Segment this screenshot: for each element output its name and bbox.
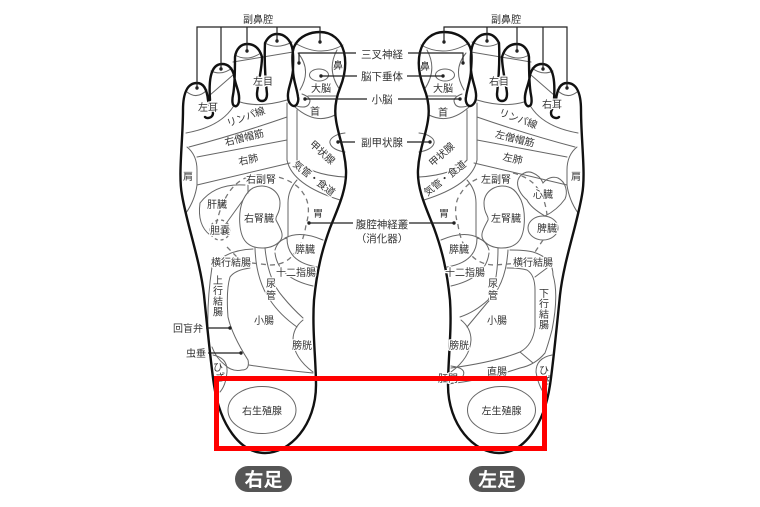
label: 肩: 肩 [571,171,581,183]
left foot nerve plexus dashed line [456,173,547,265]
label: 膀胱: 膀胱 [449,340,469,352]
label: 右肺: 右肺 [237,151,259,168]
label: 気管・食道: 気管・食道 [290,158,338,199]
callout: 小脳: 小脳 [372,94,393,106]
right gonad: 右生殖腺 [242,404,282,418]
label: 尿管: 尿 [266,278,276,290]
callout: 小脳 [303,94,462,106]
callout: 副甲状腺: 副甲状腺 [361,136,403,149]
label: 小腸: 小腸 [254,315,274,327]
red highlight frame [216,378,544,448]
label: 左肺: 左肺 [502,150,524,167]
label: 上行結腸: 結 [213,295,223,308]
label: 下行結腸: 下 [539,289,549,300]
label: 尿管: 管 [488,289,498,302]
callout: 脳下垂体 [319,71,445,83]
callout: 虫垂 [186,348,243,360]
label: 右目: 右目 [489,75,509,88]
callout: 腹腔神経叢(消化器): 腹腔神経叢 [356,218,409,231]
label: 大脳: 大脳 [433,82,453,95]
label: 甲状腺: 甲状腺 [426,140,457,169]
label: 胃: 胃 [439,208,449,220]
label: 左腎臓: 左腎臓 [491,212,521,225]
callout: 脳下垂体: 脳下垂体 [361,71,403,83]
right foot outline [180,32,346,453]
callout: 腹腔神経叢(消化器): （消化器） [356,232,408,245]
badge: 左足: 左足 [478,469,516,491]
label: リンパ線: リンパ線 [225,104,267,130]
label: ひざ: ひ [539,366,549,377]
label: 右耳: 右耳 [542,98,562,111]
label: リンパ線: リンパ線 [497,106,539,132]
label: 左耳: 左耳 [198,101,218,114]
callout: 副鼻腔 left foot [442,13,569,90]
callout: 三叉神経 [297,48,465,65]
label: 左副腎: 左副腎 [481,173,511,186]
label: 尿管: 管 [266,289,276,302]
label: 肩: 肩 [183,171,193,183]
label: 尿管: 尿 [488,278,498,290]
label: 甲状腺: 甲状腺 [307,138,338,167]
label: 肝臓: 肝臓 [207,199,227,211]
left gonad: 左生殖腺 [482,404,522,418]
label: 直腸: 直腸 [487,365,507,378]
label: 横行結腸: 横行結腸 [211,256,251,269]
badge: 右足: 右足 [244,469,283,491]
label: 左目: 左目 [253,75,273,88]
badge: 右足 [235,466,292,492]
callout: 副鼻腔 left foot: 副鼻腔 [491,13,521,26]
callout: 副鼻腔 right foot: 副鼻腔 [243,13,273,26]
label: 上行結腸: 上 [213,275,223,287]
label: ひざ: ざ [215,371,225,384]
callout: 腹腔神経叢(消化器) [307,218,456,245]
label: ひざ: ひ [213,363,223,374]
callout: 副鼻腔 right foot [195,13,322,90]
label: 肛門: 肛門 [438,373,458,385]
label: 左僧帽筋: 左僧帽筋 [494,127,536,150]
label: 右副腎: 右副腎 [246,173,276,186]
panel: left foot [418,32,584,453]
left foot outline [418,32,584,453]
left gonad [468,386,536,434]
badge: 左足 [469,466,525,492]
label: 十二指腸: 十二指腸 [276,266,316,279]
right foot interior zones [186,42,345,392]
callout: 副甲状腺 [336,136,432,149]
right foot nerve plexus dashed line [216,175,308,265]
right gonad [228,386,296,434]
label: 気管・食道: 気管・食道 [421,158,469,199]
label: 上行結腸: 腸 [213,306,223,318]
right gallbladder dashed circle [210,220,230,240]
label: 横行結腸: 横行結腸 [513,256,553,269]
label: 鼻: 鼻 [333,59,343,72]
label: ひざ: ざ [541,374,551,387]
label: 胃: 胃 [313,208,323,220]
label: 下行結腸: 行 [539,298,549,310]
panel: right foot [180,32,346,453]
label: 右腎臓: 右腎臓 [244,212,274,225]
label: 首: 首 [438,106,448,119]
label: 右僧帽筋: 右僧帽筋 [223,126,265,149]
label: 脾臓: 脾臓 [537,222,557,235]
callout: 回盲弁: 回盲弁 [173,322,203,335]
left foot interior zones [419,42,578,395]
label: 心臓: 心臓 [533,189,553,201]
label: 十二指腸: 十二指腸 [445,266,485,279]
label: 胆嚢: 胆嚢 [210,224,230,237]
label: 小腸: 小腸 [487,315,507,327]
label: 膀胱: 膀胱 [292,340,312,352]
label: 首: 首 [310,105,320,118]
label: 上行結腸: 行 [213,284,223,298]
label: 下行結腸: 腸 [539,320,549,332]
label: 下行結腸: 結 [539,308,549,321]
label: 膵臓: 膵臓 [295,243,315,256]
label: 鼻: 鼻 [420,60,430,73]
label: 膵臓: 膵臓 [449,243,469,256]
callout: 回盲弁 [173,322,232,335]
label: 大脳: 大脳 [311,82,331,95]
callout: 三叉神経: 三叉神経 [361,48,403,61]
callout: 虫垂: 虫垂 [186,348,206,360]
